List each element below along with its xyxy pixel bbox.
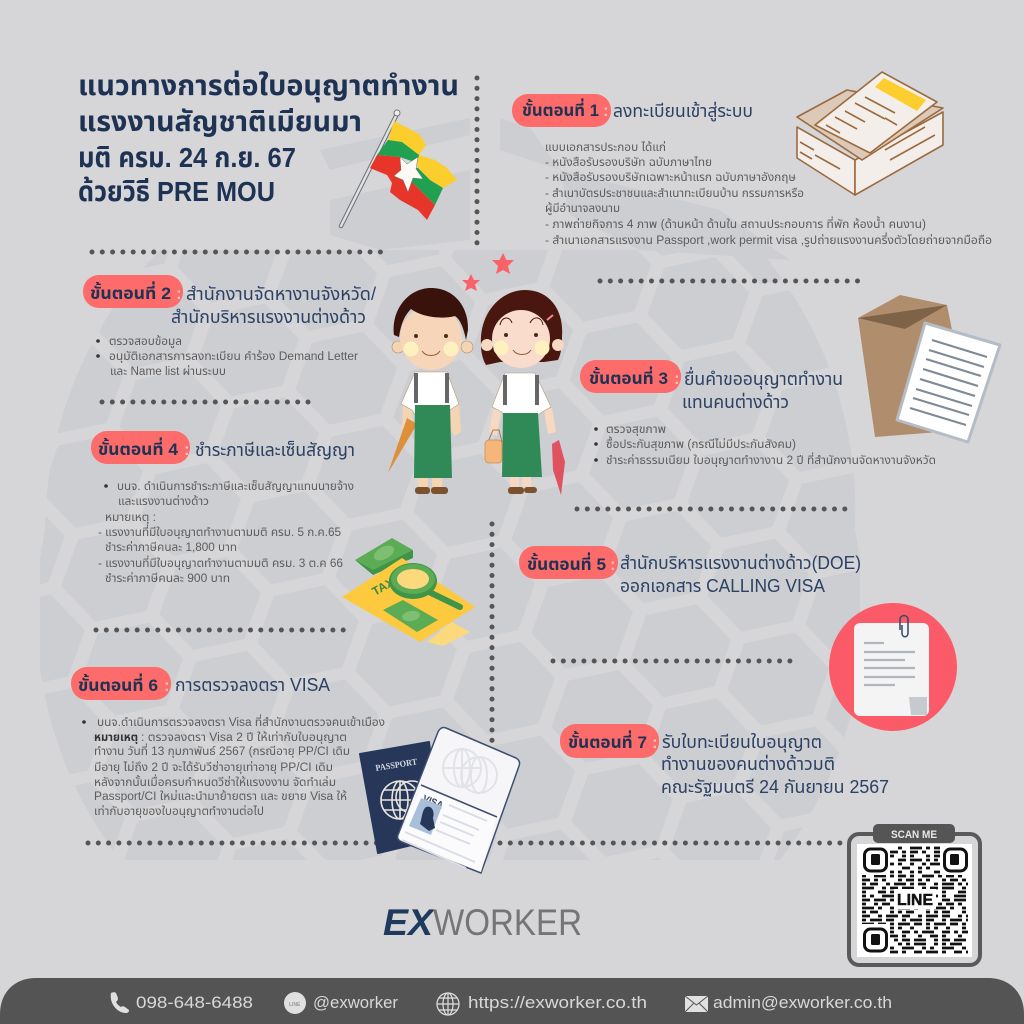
logo: EXWORKER: EX <box>383 902 435 943</box>
step 6 text: เท่ากับอายุของใบอนุญาตทำงานต่อไป <box>94 804 264 818</box>
panel: step 6 <box>71 667 385 818</box>
step 6 text: บนจ.ดำเนินการตรวจลงตรา Visa ที่สำนักงานตรวจคนเข้าเมือง <box>97 714 385 729</box>
step 1 text: แบบเอกสารประกอบ ได้แก่ <box>545 140 666 154</box>
icon: globe <box>437 993 459 1015</box>
step 5 badge <box>519 546 618 579</box>
panel: step 7: รับใบทะเบียนใบอนุญาต <box>662 732 822 753</box>
step 4 text: และแรงงานต่างด้าว <box>118 494 209 508</box>
icon: paper with clip on red circle <box>829 603 957 731</box>
icon: tax folder and magnifier <box>342 538 475 646</box>
step 6 text: ทำงาน วันที่ 13 กุมภาพันธ์ 2567 (กรณีอายุ PP/CI เดิม <box>94 743 350 758</box>
panel: step 3: : <box>674 369 680 388</box>
step 2 text <box>96 334 358 378</box>
panel: step 4: : <box>184 440 190 459</box>
step 1 text: - หนังสือรับรองบริษัท ฉบับภาษาไทย <box>545 156 712 169</box>
icon: tax folder and magnifier: TAX <box>370 575 397 599</box>
panel: step 4: ขั้นตอนที่ 4 <box>98 437 179 459</box>
panel: step 1: ลงทะเบียนเข้าสู่ระบบ <box>613 101 753 123</box>
step 7 badge <box>560 724 659 758</box>
title: มติ ครม. 24 ก.ย. 67 <box>78 142 296 173</box>
icon: phone <box>111 992 129 1013</box>
step 6 text: มีอายุ ไม่ถึง 2 ปี จะได้รับวีซ่าอายุเท่าอายุ PP/CI เดิม <box>94 760 333 774</box>
step 1 text <box>545 140 992 247</box>
step 1 text: - สำเนาบัตรประชาชนและสำเนาทะเบียนบ้าน กรรมการหรือ <box>545 186 804 200</box>
step 4 text: ชำระค่าภาษีคนละ 1,800 บาท <box>105 540 237 554</box>
step 2 text: อนุมัติเอกสารการลงทะเบียน คำร้อง Demand Letter <box>109 349 358 363</box>
panel: step 6: ขั้นตอนที่ 6 <box>78 673 158 695</box>
icon: Myanmar flag <box>341 110 457 226</box>
step 4 text: บนจ. ดำเนินการชำระภาษีและเซ็นสัญญาแทนนายจ้าง <box>117 479 354 493</box>
icon: LINE chat: LINE <box>289 1002 301 1008</box>
footer bar: 098-648-6488 <box>136 993 253 1012</box>
step 3 badge <box>580 360 681 393</box>
step 3 text: ตรวจสุขภาพ <box>606 424 666 436</box>
step 6 text <box>82 714 385 818</box>
panel: step 1: ขั้นตอนที่ 1 <box>522 98 599 120</box>
panel: step 6: การตรวจลงตรา VISA <box>175 675 330 695</box>
panel: step 2: สำนักงานจัดหางานจังหวัด/ <box>186 284 376 304</box>
step 2 text: และ Name list ผ่านระบบ <box>110 364 226 378</box>
icon: document stack <box>797 72 943 195</box>
panel: step 4: ชำระภาษีและเซ็นสัญญา <box>195 440 355 460</box>
panel: step 7: คณะรัฐมนตรี 24 กันยายน 2567 <box>661 777 889 797</box>
footer bar: @exworker <box>313 993 398 1012</box>
icon: mail <box>685 996 708 1012</box>
title <box>78 70 459 207</box>
panel: step 3: ขั้นตอนที่ 3 <box>589 366 668 388</box>
step 6 badge <box>71 667 171 700</box>
step 3 text: ซื้อประกันสุขภาพ (กรณีไม่มีประกันสังคม) <box>606 436 796 451</box>
panel: step 7: : <box>652 733 658 752</box>
panel: step 5 <box>519 546 861 596</box>
panel: step 3 <box>580 360 936 467</box>
title: ด้วยวิธี PRE MOU <box>78 176 275 207</box>
illustration: woman in longyi <box>481 290 565 495</box>
panel: step 5: ขั้นตอนที่ 5 <box>527 552 606 574</box>
step 3 text: ชำระค่าธรรมเนียม ใบอนุญาตทำงางาน 2 ปี ที่สำนักงานจัดหางานจังหวัด <box>606 452 936 467</box>
step 6 text: Passport/CI ใหม่และนำมาย้ายตรา และ ขยาย Visa ให้ <box>94 789 347 803</box>
step 2 text: ตรวจสอบข้อมูล <box>109 334 182 348</box>
panel: step 2: สำนักบริหารแรงงานต่างด้าว <box>171 307 366 327</box>
panel: step 3: แทนคนต่างด้าว <box>682 392 789 412</box>
icon: passport and visa: PASSPORT <box>375 757 418 773</box>
step 1 text: - สำเนาเอกสารแรงงาน Passport ,work permit visa ,รูปถ่ายแรงงานครึ่งตัวโดยถ่ายจากมือถือ <box>545 232 992 247</box>
illustration: two stars <box>462 253 514 291</box>
panel: step 7: ขั้นตอนที่ 7 <box>568 730 647 752</box>
QR code: scan me <box>849 824 980 965</box>
panel: step 4 <box>91 431 355 585</box>
panel: step 7: ทำงานของคนต่างด้าวมติ <box>661 754 835 774</box>
panel: step 1: : <box>603 101 609 120</box>
icon: LINE chat <box>284 992 306 1014</box>
panel: step 3: ยื่นคำขออนุญาตทำงาน <box>684 366 843 390</box>
panel: step 5: สำนักบริหารแรงงานต่างด้าว(DOE) <box>620 553 861 573</box>
logo: EXWORKER <box>383 902 582 943</box>
step 1 badge <box>512 94 611 127</box>
panel: step 5: : <box>610 555 616 574</box>
step 6 text: หมายเหตุ <box>94 732 138 744</box>
footer bar: admin@exworker.co.th <box>713 993 892 1012</box>
logo: EXWORKER: WORKER <box>433 902 582 943</box>
title: แนวทางการต่อใบอนุญาตทำงาน <box>78 70 459 102</box>
step 3 text <box>594 424 936 467</box>
icon: passport and visa: VISA <box>421 794 444 812</box>
icon: envelope and document <box>858 295 1000 442</box>
step 1 text: - ภาพถ่ายกิจการ 4 ภาพ (ด้านหน้า ด้านใน สถานประกอบการ ที่พัก ห้องน้ำ คนงาน) <box>545 216 926 231</box>
background: hexagon globe <box>40 118 860 860</box>
step 1 text: - หนังสือรับรองบริษัทเฉพาะหน้าแรก ฉบับภาษาอังกฤษ <box>545 170 796 184</box>
step 4 text: ชำระค่าภาษีคนละ 900 บาท <box>105 571 230 585</box>
step 1 text: ผู้มีอำนาจลงนาม <box>545 201 620 215</box>
panel: step 7 <box>560 724 889 797</box>
panel: step 2 <box>83 275 376 378</box>
QR code: scan me: SCAN ME <box>891 829 937 841</box>
panel: step 2: ขั้นตอนที่ 2 <box>90 281 171 303</box>
step 4 text: หมายเหตุ : <box>105 512 156 524</box>
step 6 text: : ตรวจลงตรา Visa 2 ปี ให้เท่ากับใบอนุญาต <box>141 730 347 744</box>
QR code: scan me: LINE <box>897 892 933 909</box>
step 4 badge <box>91 431 190 464</box>
footer bar <box>0 978 1024 1024</box>
step 4 text <box>98 479 354 585</box>
title: แรงงานสัญชาติเมียนมา <box>78 106 362 137</box>
icon: passport and visa <box>360 728 520 873</box>
footer bar: https://exworker.co.th <box>468 993 647 1012</box>
step 4 text: - แรงงานที่มีใบอนุญาตทำงานตามมติ ครม. 5 ก.ค.65 <box>98 524 341 539</box>
illustration: man in longyi <box>388 288 473 494</box>
step 6 text: หลังจากนั้นเมื่อครบกำหนดวีซ่าให้แรงงงาน จัดทำเล่ม <box>94 774 336 789</box>
panel: step 2: : <box>176 284 182 303</box>
step 2 badge <box>83 275 183 308</box>
step 4 text: - แรงงานที่มีใบอนุญาตทำงานตามมติ ครม. 3 ต.ค 66 <box>98 555 343 570</box>
panel: step 6: : <box>164 676 170 695</box>
panel: step 1 <box>512 94 992 247</box>
dotted dividers <box>88 78 862 843</box>
panel: step 5: ออกเอกสาร CALLING VISA <box>620 576 825 596</box>
